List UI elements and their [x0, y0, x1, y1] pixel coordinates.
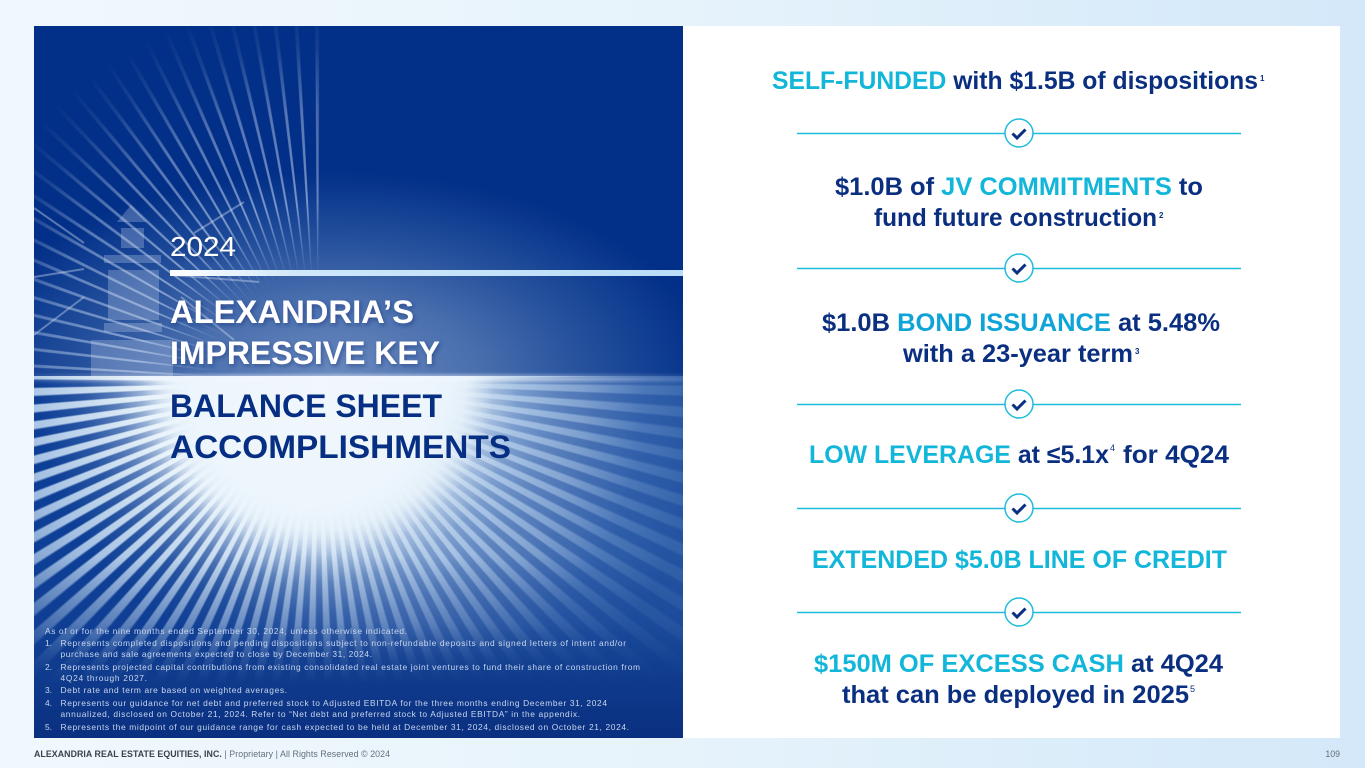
footnotes: annualized, disclosed on October 21, 2024. Refer to “Net debt and preferred stock to Adjusted EBITDA” in the appendix. — [60, 709, 580, 719]
item: self-funded: 1 — [1260, 74, 1265, 83]
title: white lines: ALEXANDRIA’S — [170, 294, 414, 330]
lower sunburst — [34, 376, 683, 738]
item: self-funded: SELF-FUNDED with $1.5B of dispositions — [772, 67, 1258, 95]
upper sky with glow — [34, 26, 683, 378]
title: navy lines: BALANCE SHEET — [170, 388, 442, 424]
divider with check 4 — [797, 494, 1241, 522]
item: JV commitments: fund future construction — [874, 204, 1157, 232]
item: excess cash: 5 — [1190, 684, 1195, 694]
bottom fade — [34, 376, 683, 738]
footnotes: 4. — [45, 698, 52, 708]
footnotes: Represents the midpoint of our guidance range for cash expected to be held at December 31, 2024, disclosed on October 21, 2024. — [60, 722, 629, 732]
divider with check 1 — [797, 119, 1241, 147]
footnotes: Debt rate and term are based on weighted averages. — [60, 685, 287, 695]
footnotes: Represents our guidance for net debt and preferred stock to Adjusted EBITDA for the three months ending December 31, 2024 — [60, 698, 607, 708]
item: bond issuance: with a 23-year term — [902, 340, 1133, 368]
item: line of credit: EXTENDED $5.0B LINE OF CREDIT — [812, 546, 1227, 574]
item: bond issuance — [822, 309, 1220, 368]
title: navy lines: ACCOMPLISHMENTS — [170, 429, 511, 465]
footnotes: 3. — [45, 685, 52, 695]
item: low leverage: for 4Q24 — [1123, 441, 1229, 469]
item: JV commitments: 2 — [1159, 211, 1164, 220]
item: low leverage: LOW LEVERAGE at ≤5.1x — [809, 441, 1109, 469]
heading rule — [170, 270, 683, 276]
panel: right white card — [683, 26, 1340, 738]
item: excess cash: that can be deployed in 2025 — [842, 681, 1189, 709]
footnotes: 5. — [45, 722, 52, 732]
item: bond issuance: $1.0B BOND ISSUANCE at 5.48% — [822, 309, 1220, 337]
divider with check 5 — [797, 598, 1241, 626]
item: excess cash: $150M OF EXCESS CASH at 4Q24 — [814, 650, 1223, 678]
icon: lighthouse silhouette — [34, 201, 259, 376]
footnotes: As of or for the nine months ended September 30, 2024, unless otherwise indicated. — [45, 626, 407, 636]
year label: 2024 — [170, 231, 236, 262]
item: bond issuance: 3 — [1135, 347, 1140, 356]
footnotes: purchase and sale agreements expected to close by December 31, 2024. — [60, 649, 372, 659]
sun glow — [34, 376, 683, 738]
horizon band — [34, 372, 683, 384]
panel: left sunburst image — [34, 26, 683, 738]
footnotes: Represents completed dispositions and pending dispositions subject to non-refundable deposits and signed letters of intent and/or — [60, 638, 626, 648]
footnotes — [45, 626, 640, 732]
title: white lines: IMPRESSIVE KEY — [170, 335, 440, 371]
item: JV commitments: $1.0B of JV COMMITMENTS to — [835, 173, 1203, 201]
footnotes: Represents projected capital contributions from existing consolidated real estate joint ventures to fund their share of construction from — [60, 662, 640, 672]
footnotes: 2. — [45, 662, 52, 672]
item: low leverage: 4 — [1110, 443, 1115, 453]
title: navy lines — [170, 388, 511, 465]
thin sky rays — [34, 26, 320, 376]
footnotes: 4Q24 through 2027. — [60, 673, 147, 683]
item: JV commitments — [835, 173, 1203, 232]
footnotes: 1. — [45, 638, 52, 648]
page number: 109 — [1325, 749, 1340, 759]
footer: ALEXANDRIA REAL ESTATE EQUITIES, INC. | Proprietary | All Rights Reserved © 2024 — [34, 749, 390, 759]
divider with check 2 — [797, 254, 1241, 282]
item: excess cash — [814, 650, 1223, 709]
title: white lines — [170, 294, 440, 371]
divider with check 3 — [797, 390, 1241, 418]
dark rays — [34, 376, 683, 674]
